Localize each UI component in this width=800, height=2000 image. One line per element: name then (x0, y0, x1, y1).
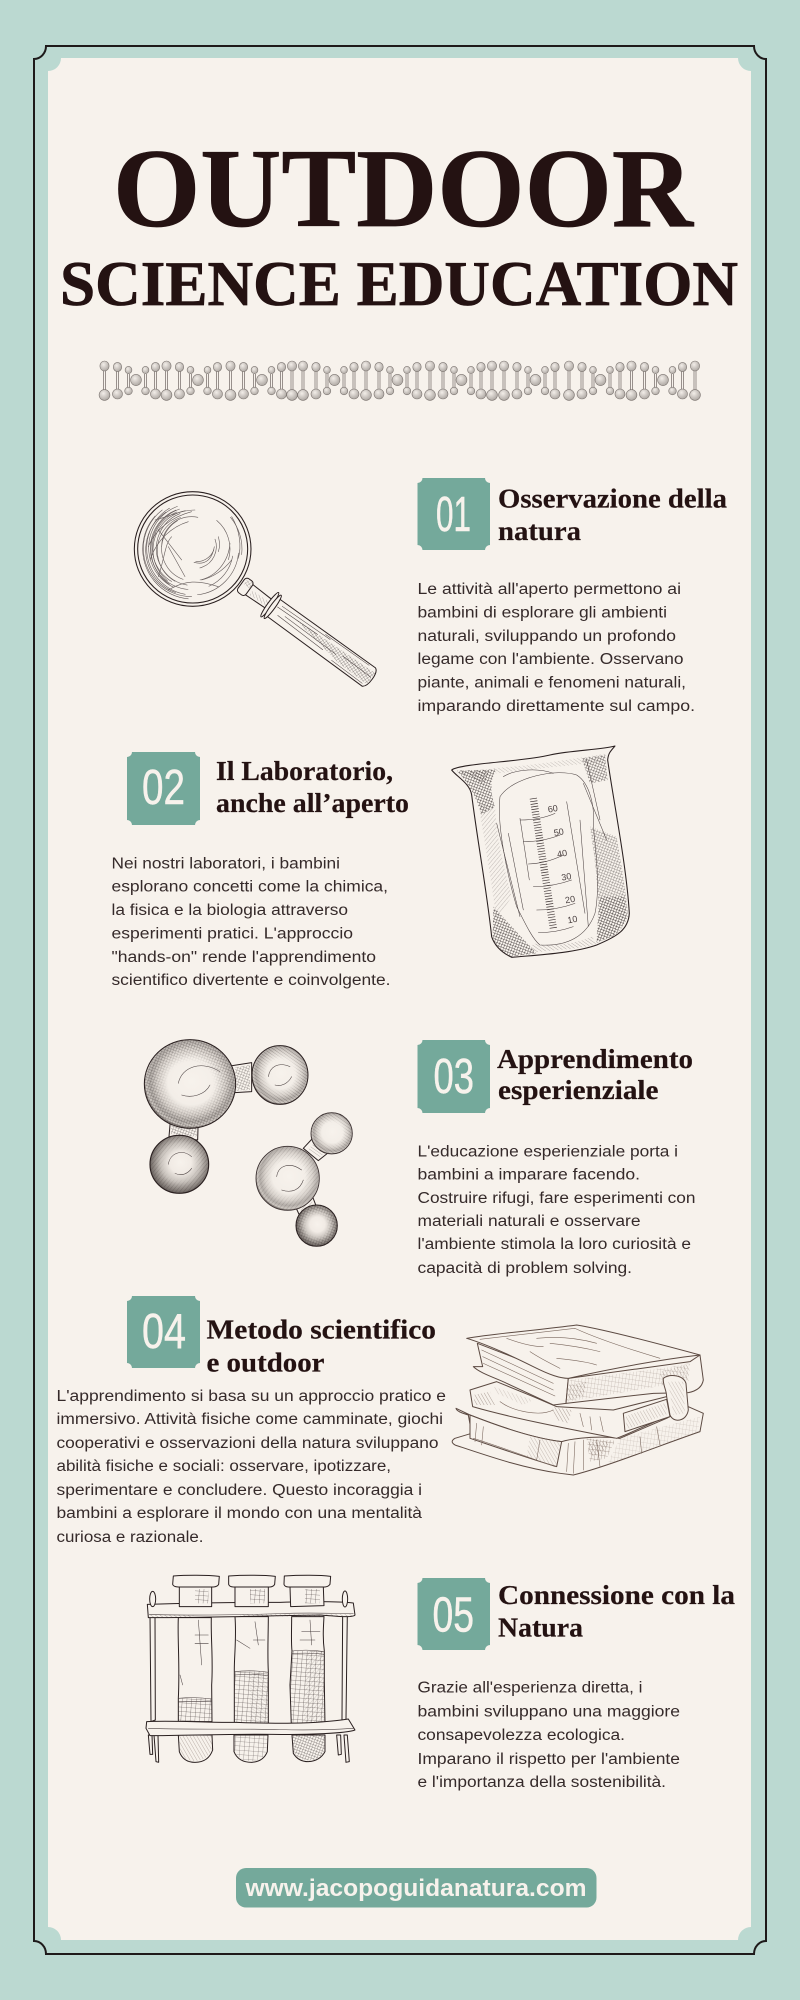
text 03: l'ambiente stimola la loro curiosità e (418, 1236, 691, 1253)
section 04 (56, 1296, 703, 1546)
text 01: Le attività all'aperto permettono ai (418, 581, 681, 598)
text 04: bambini a esplorare il mondo con una mentalità (56, 1505, 422, 1522)
icon: magnifying glass (123, 479, 381, 691)
text 02: esperimenti pratici. L'approccio (112, 926, 353, 942)
section 05 (146, 1575, 736, 1791)
text 04: L'apprendimento si basa su un approccio pratico e (56, 1388, 446, 1405)
badge 04: 04 (142, 1305, 186, 1359)
text 03: capacità di problem solving. (418, 1260, 632, 1277)
heading 05: Natura (498, 1612, 584, 1642)
text 02: la fisica e la biologia attraverso (112, 902, 348, 919)
website button: www.jacopoguidanatura.com (244, 1875, 587, 1902)
text 05: Grazie all'esperienza diretta, i (418, 1680, 642, 1696)
heading 03: esperienziale (498, 1075, 659, 1105)
heading 01: natura (498, 516, 582, 546)
text 03: materiali naturali e osservare (418, 1213, 640, 1230)
text 04: cooperativi e osservazioni della natura sviluppano (56, 1435, 438, 1452)
badge 02 (127, 752, 200, 825)
icon: beaker: 60 (547, 803, 559, 815)
icon: beaker: 30 (561, 871, 572, 883)
section 02 (112, 746, 629, 989)
badge 04 (127, 1296, 200, 1368)
text 05: e l'importanza della sostenibilità. (418, 1774, 666, 1791)
icon: beaker: 50 (553, 826, 565, 838)
heading 04: Metodo scientifico (206, 1314, 436, 1344)
text 01: legame con l'ambiente. Osservano (418, 651, 684, 668)
text 01: bambini di esplorare gli ambienti (418, 604, 667, 622)
title (60, 127, 738, 319)
heading 03 (497, 1044, 693, 1105)
icon: beaker (452, 746, 629, 957)
text 04: abilità fisiche e sociali: osservare, ipotizzare, (56, 1458, 391, 1475)
text 02: scientifico divertente e coinvolgente. (112, 972, 390, 989)
heading 02 (216, 756, 409, 818)
text 05 (418, 1680, 680, 1791)
text 01 (418, 581, 695, 715)
text 02: "hands-on" rende l'apprendimento (112, 949, 376, 966)
text 03 (418, 1144, 696, 1277)
text 01: imparando direttamente sul campo. (418, 698, 695, 715)
text 03: Costruire rifugi, fare esperimenti con (418, 1190, 696, 1207)
dna strip divider (99, 361, 700, 400)
text 02 (112, 856, 390, 989)
heading 02: anche all’aperto (216, 788, 409, 818)
heading 03: Apprendimento (497, 1044, 693, 1074)
text 02: esplorano concetti come la chimica, (112, 878, 388, 896)
text 02: Nei nostri laboratori, i bambini (112, 856, 340, 872)
text 01: piante, animali e fenomeni naturali, (418, 674, 686, 692)
icon: stack of books (452, 1325, 703, 1475)
title: OUTDOOR (113, 127, 694, 251)
icon: molecules (144, 1040, 352, 1246)
text 05: bambini sviluppano una maggiore (418, 1704, 680, 1720)
section 01 (123, 478, 728, 715)
badge 03 (418, 1040, 490, 1113)
heading 01: Osservazione della (498, 484, 728, 514)
text 04 (56, 1388, 446, 1546)
badge 05: 05 (432, 1588, 474, 1642)
icon: test tube rack (146, 1575, 355, 1762)
icon: beaker: 40 (556, 848, 568, 859)
badge 01 (418, 478, 490, 550)
text 04: curiosa e razionale. (56, 1529, 204, 1546)
heading 04: e outdoor (206, 1348, 325, 1378)
text 03: L'educazione esperienziale porta i (418, 1144, 678, 1160)
heading 05: Connessione con la (498, 1580, 736, 1610)
section 03 (144, 1040, 696, 1277)
badge 05 (418, 1578, 490, 1650)
title: SCIENCE EDUCATION (60, 249, 738, 319)
text 01: naturali, sviluppando un profondo (418, 628, 676, 645)
icon: beaker: 20 (564, 894, 576, 905)
text 04: sperimentare e concludere. Questo incoraggia i (56, 1482, 422, 1499)
text 03: bambini a imparare facendo. (418, 1166, 640, 1184)
badge 03: 03 (434, 1050, 474, 1104)
badge 02: 02 (142, 761, 185, 815)
text 05: Imparano il rispetto per l'ambiente (418, 1751, 680, 1768)
heading 01 (498, 484, 728, 546)
heading 04 (206, 1314, 436, 1378)
icon: beaker: 10 (567, 914, 578, 925)
heading 05 (498, 1580, 736, 1642)
heading 02: Il Laboratorio, (216, 756, 393, 786)
badge 01: 01 (436, 488, 471, 542)
text 05: consapevolezza ecologica. (418, 1727, 625, 1744)
website button (236, 1868, 596, 1908)
text 04: immersivo. Attività fisiche come camminate, giochi (56, 1411, 443, 1428)
